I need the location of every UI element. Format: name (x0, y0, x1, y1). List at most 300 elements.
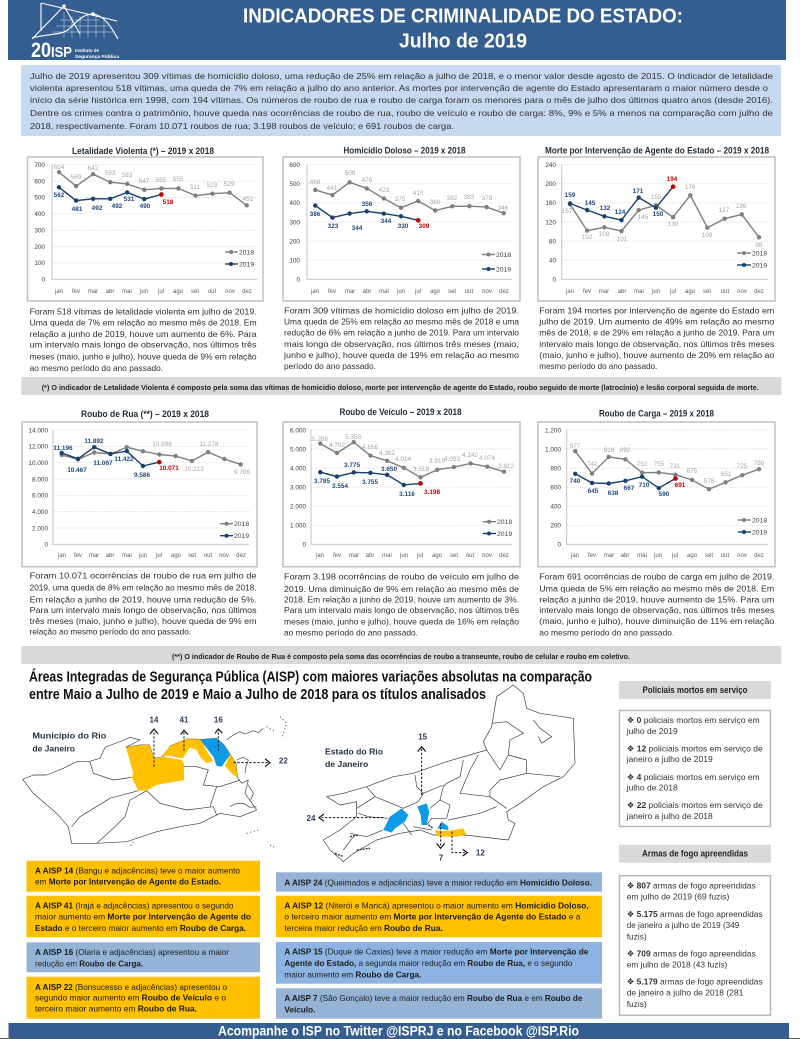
panel: Letalidade Violenta chart: abr (106, 289, 114, 295)
panel: Roubo de Carga chart: 731 (670, 463, 681, 470)
footer banner: Acompanhe o ISP no Twitter @ISPRJ e no Facebook @ISP.Rio (218, 1024, 579, 1038)
ISP logo: Instituto de (75, 48, 99, 53)
panel heading (619, 845, 771, 863)
panel: Letalidade Violenta chart: 490 (140, 203, 151, 210)
map labels: 16 (214, 716, 223, 725)
panel: Roubo de Veículo chart: set (450, 553, 458, 559)
panel: Roubo de Carga chart: set (705, 553, 713, 559)
callout: AISP 16: A AISP 16 (Olaria e adjacências) apresentou a maior (35, 947, 229, 957)
text: Letalidade Violenta description: relação a junho de 2019, houve um aumento de 6%. Para (30, 329, 257, 339)
panel: Roubo de Rua chart: 10.467 (67, 467, 87, 474)
panel: Roubo de Rua chart (22, 409, 257, 567)
panel: Homicídio Doloso chart: 200 (289, 238, 300, 245)
map title (32, 731, 106, 753)
panel: Homicídio Doloso chart: 344 (381, 218, 392, 225)
panel: Homicídio Doloso chart: 300 (289, 219, 300, 226)
callout: AISP 12 (276, 896, 602, 937)
list of police deaths: ❖ 4 policiais mortos em serviço em (627, 772, 760, 782)
panel: Homicídio Doloso chart: mar (345, 289, 355, 295)
ISP logo (31, 3, 119, 62)
panel: Roubo de Veículo chart: 3.198 (424, 489, 440, 496)
footnote: Letalidade Violenta: (*) O indicador de Letalidade Violenta é composto pela soma das vítimas de homicídio doloso, morte por intervenção de agente do Estado, roubo seguido de morte (latrocínio) e lesão corporal seguida de morte. (42, 383, 759, 392)
panel: Roubo de Carga chart: 1.000 (545, 446, 561, 453)
panel: Letalidade Violenta chart: set (191, 289, 199, 295)
map title: de Janeiro (32, 743, 75, 753)
panel: Roubo de Rua chart: 11.278 (199, 441, 219, 448)
panel: Roubo de Carga chart: abr (621, 553, 629, 559)
panel: Roubo de Veículo chart: jul (416, 553, 423, 559)
panel: Roubo de Carga chart: 590 (659, 491, 670, 498)
map title: de Janeiro (325, 759, 368, 769)
callout: AISP 15: maior aumento em Roubo de Carga. (284, 969, 421, 979)
panel: Roubo de Veículo chart: abr (366, 553, 374, 559)
panel: Letalidade Violenta chart: 562 (54, 192, 65, 199)
panel: Roubo de Veículo chart: jun (399, 553, 408, 559)
panel: Morte por Intervenção chart: 155 (651, 194, 662, 201)
list of seized firearms: ❖ 5.175 armas de fogo apreendidas (627, 909, 763, 919)
title (243, 6, 683, 52)
AISP 41 region (162, 739, 213, 763)
panel: Roubo de Rua chart: 10.213 (184, 466, 204, 473)
ISP logo: 20 (31, 39, 51, 62)
AISP section heading: entre Maio a Julho de 2019 e Maio a Julho de 2018 para os títulos analisados (29, 687, 486, 703)
panel: Homicídio Doloso chart: 0 (296, 277, 300, 284)
panel: Morte por Intervenção chart: 240 (545, 162, 556, 169)
panel: Morte por Intervenção chart: 171 (633, 188, 644, 195)
panel: Letalidade Violenta chart: 583 (122, 172, 133, 179)
text: Roubo de Carga description: ao mesmo período do ano passado. (539, 628, 674, 638)
panel: Roubo de Veículo chart: 5.286 (312, 436, 328, 443)
list of seized firearms: ❖ 807 armas de fogo apreendidas (627, 880, 756, 890)
panel: Morte por Intervenção chart: mai (634, 289, 644, 295)
panel: Letalidade Violenta chart: out (208, 289, 217, 295)
callout: AISP 15: Agente do Estado, a segunda maior redução em Roubo de Rua, e o segundo (284, 958, 573, 968)
panel: Letalidade Violenta chart: 593 (105, 170, 116, 177)
panel: Roubo de Carga chart: 200 (550, 523, 561, 530)
panel: Roubo de Veículo chart: 3.116 (399, 491, 415, 498)
panel: Roubo de Carga chart: 752 (637, 461, 648, 468)
panel: Homicídio Doloso chart: 323 (328, 223, 339, 230)
panel: Homicídio Doloso chart: 330 (398, 223, 409, 230)
text: Morte por Intervenção description: Foram 194 mortes por intervenção de agente do Estado em (539, 306, 774, 316)
callout: AISP 7: Veículo. (284, 1004, 315, 1014)
panel: Morte por Intervenção chart: 0 (552, 277, 556, 284)
panel: Roubo de Carga chart: 710 (639, 482, 650, 489)
panel: Roubo de Rua chart: 9.786 (234, 469, 250, 476)
map: Estado do Rio de Janeiro (307, 685, 575, 862)
panel: Roubo de Carga chart (538, 408, 775, 567)
panel: Homicídio Doloso chart: dez (499, 289, 509, 295)
title: Julho de 2019 (399, 30, 527, 52)
panel: Letalidade Violenta chart: 523 (207, 182, 218, 189)
text: Homicídio Doloso description: redução de 6% em relação a junho de 2019. Para um intervalo (284, 328, 519, 338)
text: Homicídio Doloso description: junho e julho), houve queda de 19% em relação ao mesmo (283, 350, 519, 360)
text: Roubo de Carga description: Foram 691 ocorrências de roubo de carga em julho de 2019. (539, 572, 774, 582)
legend: 2019 (239, 261, 254, 268)
panel: Morte por Intervenção chart: 157 (562, 208, 573, 215)
panel: Roubo de Veículo chart: mai (382, 553, 392, 559)
list of seized firearms: em julho de 2018 (43 fuzis) (627, 960, 727, 970)
panel: Homicídio Doloso chart: out (465, 289, 474, 295)
legend: 2018 (752, 250, 767, 257)
panel: Homicídio Doloso chart: 378 (482, 195, 493, 202)
ISP logo: Segurança Pública (75, 54, 119, 59)
panel: Roubo de Carga chart: 740 (570, 478, 581, 485)
panel: Letalidade Violenta chart: jan (54, 289, 63, 295)
map title: Estado do Rio (325, 747, 383, 757)
callout: AISP 14 (26, 861, 260, 892)
panel: Roubo de Veículo chart: 4.074 (479, 455, 495, 462)
text: Homicídio Doloso description: Uma queda de 25% em relação ao mesmo mês de 2018 e uma (284, 316, 519, 326)
panel: Roubo de Rua chart: 11.422 (114, 456, 134, 463)
panel: Letalidade Violenta chart: 531 (124, 196, 135, 203)
panel heading (619, 681, 771, 699)
callout: AISP 7: A AISP 7 (São Gonçalo) teve a maior redução em Roubo de Rua e em Roubo de (284, 993, 583, 1003)
text: Roubo de Rua description: Em relação a junho de 2019, houve uma redução de 5%. (30, 594, 257, 604)
callout: AISP 22: segundo maior aumento em Roubo de Veículo e o (35, 993, 226, 1003)
panel: Homicídio Doloso chart: 383 (464, 194, 475, 201)
text: Roubo de Rua description: Foram 10.071 ocorrências de roubo de rua em julho de (30, 571, 257, 581)
panel: Policiais mortos em serviço (619, 681, 771, 826)
panel: Morte por Intervenção chart: out (721, 289, 730, 295)
panel: Letalidade Violenta chart: 642 (88, 165, 99, 172)
panel: Homicídio Doloso chart: set (448, 289, 456, 295)
legend: 2018 (234, 521, 249, 528)
panel: Letalidade Violenta chart: 0 (41, 277, 45, 284)
panel: Letalidade Violenta chart: 700 (34, 162, 45, 169)
callout: AISP 16 (26, 942, 260, 972)
callout: AISP 22: terceiro maior aumento em Roubo de Rua. (35, 1003, 197, 1013)
panel: Morte por Intervenção chart: 40 (549, 258, 556, 264)
panel: Roubo de Rua chart: mai (122, 553, 132, 559)
list of police deaths: ❖ 12 policiais mortos em serviço de (627, 743, 763, 753)
panel: Roubo de Carga chart: 1.200 (545, 427, 561, 434)
panel: Roubo de Carga chart: 755 (654, 461, 665, 468)
list of police deaths: julho de 2019 (626, 726, 678, 736)
callout: AISP 14: A AISP 14 (Bangu e adjacências) teve o maior aumento (35, 865, 240, 875)
panel: Roubo de Veículo chart: ago (432, 553, 443, 559)
panel: Roubo de Rua chart: 0 (44, 542, 48, 549)
text: Morte por Intervenção description: julho de 2019. Um aumento de 49% em relação ao mesmo (538, 316, 775, 326)
panel: Roubo de Rua chart: set (188, 553, 196, 559)
map: Município do Rio de Janeiro (23, 716, 288, 848)
panel: Morte por Intervenção chart: 136 (736, 203, 747, 210)
panel heading: Policiais mortos em serviço (642, 685, 748, 695)
panel: Roubo de Veículo chart: fev (333, 553, 341, 559)
panel: Homicídio Doloso chart: 386 (310, 211, 321, 218)
callout: AISP 41: maior aumento em Morte por Intervenção de Agente do (35, 912, 251, 922)
panel: Roubo de Carga chart: dez (754, 553, 764, 559)
callout: AISP 22: A AISP 22 (Bonsucesso e adjacências) apresentou o (35, 982, 227, 992)
panel: Letalidade Violenta chart (28, 146, 263, 301)
panel: Morte por Intervenção chart: set (703, 289, 711, 295)
text: Letalidade Violenta description: Uma queda de 7% em relação ao mesmo mês de 2018. Em (30, 318, 257, 328)
panel: Morte por Intervenção chart (538, 146, 775, 301)
map title (325, 747, 383, 769)
panel: Letalidade Violenta chart: fev (72, 289, 80, 295)
panel: Roubo de Carga chart: 0 (557, 542, 561, 549)
arrows (319, 747, 467, 856)
AISP 7 region (437, 822, 448, 830)
panel: Roubo de Carga chart: jul (671, 553, 678, 559)
text: Letalidade Violenta description: um intervalo mais longo de observação, nos últimos três (30, 340, 257, 350)
chart title: Morte por Intervenção de Agente do Estado – 2019 x 2018 (545, 146, 769, 156)
panel: Letalidade Violenta chart: 452 (243, 196, 254, 203)
legend (483, 519, 512, 538)
list of police deaths: julho de 2018 (626, 782, 678, 792)
panel: Homicídio Doloso chart: 360 (430, 199, 441, 206)
panel: Morte por Intervenção chart: 88 (755, 242, 763, 249)
panel: Roubo de Veículo chart: 4.382 (379, 450, 395, 457)
list of seized firearms: fuzis) (627, 932, 647, 942)
AISP 16 region (200, 738, 230, 767)
text: Roubo de Veículo description: ao mesmo período do ano passado. (284, 628, 418, 638)
list of seized firearms: ❖ 5.179 armas de fogo apreendidas (627, 977, 763, 987)
panel: Roubo de Carga chart: 918 (604, 447, 615, 454)
legend (737, 250, 767, 269)
panel: Roubo de Carga chart: fev (588, 553, 596, 559)
panel: Morte por Intervenção chart: ago (685, 289, 696, 295)
panel: Roubo de Carga chart: jan (570, 553, 579, 559)
panel: Roubo de Carga chart: 400 (550, 504, 561, 510)
chart title: Roubo de Rua (**) – 2019 x 2018 (81, 409, 209, 420)
legend: 2018 (752, 517, 767, 524)
panel: Roubo de Veículo chart: 2.000 (290, 504, 306, 510)
panel: Morte por Intervenção chart: 176 (685, 184, 696, 191)
list of seized firearms: em julho de 2019 (69 fuzis) (627, 892, 729, 902)
map labels: 41 (180, 716, 189, 725)
panel: Morte por Intervenção chart: jun (651, 289, 660, 295)
panel: Letalidade Violenta chart: 529 (224, 181, 235, 188)
panel: Roubo de Rua chart: 11.196 (53, 445, 73, 452)
panel: Homicídio Doloso chart: abr (363, 289, 371, 295)
text: Letalidade Violenta description: Foram 518 vítimas de letalidade violenta em julho de 2019. (30, 307, 257, 317)
panel: Letalidade Violenta chart: 100 (34, 260, 45, 267)
panel: Roubo de Carga chart: 691 (675, 482, 686, 489)
panel: Roubo de Veículo chart: 4.656 (362, 444, 378, 451)
callout: AISP 41 (26, 896, 260, 937)
footnote: Roubo de Rua: (**) O indicador de Roubo de Rua é composto pela soma das ocorrências de roubo a transeunte, roubo de celular e roubo em coletivo. (172, 652, 630, 661)
footnote: Roubo de Rua (21, 646, 781, 664)
summary text block: Julho de 2019 apresentou 309 vítimas de homicídio doloso, uma redução de 25% em relação a julho de 2018, e o menor valor desde agosto de 2015. O indicador de letalidade (30, 71, 773, 81)
panel: Morte por Intervenção chart: 194 (667, 176, 678, 183)
panel: Homicídio Doloso chart: 600 (289, 162, 300, 169)
panel: Roubo de Carga chart: 638 (608, 490, 619, 497)
panel: Morte por Intervenção chart: fev (583, 289, 591, 295)
text: Roubo de Carga description: intervalo mais longo de observação, nos últimos três meses (539, 605, 774, 615)
panel: Roubo de Veículo chart: 3.812 (498, 463, 514, 470)
panel: Roubo de Carga chart: 788 (754, 460, 765, 467)
callout: AISP 41: A AISP 41 (Irajá e adjacências) apresentou o segundo (35, 900, 234, 910)
legend: 2019 (234, 533, 249, 540)
panel: Homicídio Doloso chart: 346 (498, 205, 509, 212)
text: Roubo de Veículo description: Para um intervalo mais longo de observação, nos últimos três (284, 605, 519, 615)
panel: Morte por Intervenção chart: dez (754, 289, 764, 295)
panel: Homicídio Doloso chart: 441 (327, 185, 338, 192)
panel: Homicídio Doloso chart: mai (379, 289, 389, 295)
panel: Roubo de Rua chart: jun (138, 553, 147, 559)
panel heading: Armas de fogo apreendidas (642, 848, 748, 858)
summary text block: início da série histórica em 1998, com 194 vítimas. Os números de roubo de rua e roubo de carga foram os menores para o mês de julho dos últimos quatro anos (desde 2016). (30, 95, 773, 105)
footer banner (0, 1023, 800, 1039)
panel: Roubo de Veículo chart: 3.518 (413, 466, 429, 473)
panel: Roubo de Veículo chart: out (466, 553, 475, 559)
list of police deaths: janeiro a julho de 2019 (626, 754, 713, 764)
title: INDICADORES DE CRIMINALIDADE DO ESTADO: (243, 6, 683, 28)
text: Morte por Intervenção description (538, 306, 775, 371)
legend (225, 249, 254, 268)
panel: Roubo de Veículo chart: nov (482, 553, 492, 559)
panel: Homicídio Doloso chart: 423 (379, 187, 390, 194)
panel: Letalidade Violenta chart: mar (88, 289, 98, 295)
text: Morte por Intervenção description: (maio, junho e julho), houve aumento de 20% em relação ao (539, 350, 775, 360)
panel: Roubo de Rua chart: abr (106, 553, 114, 559)
panel: Homicídio Doloso chart: 344 (352, 225, 363, 232)
text: Morte por Intervenção description: intervalo mais longo de observação, nos últimos três meses (539, 339, 774, 349)
panel: Roubo de Veículo chart: 3.554 (332, 483, 348, 490)
map labels: 12 (476, 849, 485, 858)
panel: Roubo de Carga chart: 578 (704, 478, 715, 485)
list of seized firearms: fuzis) (627, 999, 647, 1009)
panel: Roubo de Carga chart: mai (637, 553, 647, 559)
panel: Roubo de Rua chart: 14.000 (28, 427, 48, 434)
panel: Morte por Intervenção chart: jul (669, 289, 676, 295)
callout: AISP 15 (276, 942, 602, 984)
chart title: Roubo de Carga – 2019 x 2018 (599, 408, 714, 419)
panel: Roubo de Veículo chart: 4.000 (290, 465, 306, 472)
callout: AISP 12: o terceiro maior aumento em Morte por Intervenção de Agente do Estado e a (284, 912, 581, 922)
panel: Roubo de Carga chart: ago (687, 553, 698, 559)
text: Roubo de Rua description: três meses (maio, junho e julho), houve queda de 9% em (30, 616, 257, 626)
text: Roubo de Carga description: (maio, junho e julho), houve diminuição de 11% em relação (539, 616, 775, 626)
panel: Morte por Intervenção chart: 101 (617, 236, 628, 243)
panel: Letalidade Violenta chart: mai (122, 289, 132, 295)
AISP 24 region (383, 808, 408, 833)
panel: Homicídio Doloso chart: 356 (362, 201, 373, 208)
panel: Morte por Intervenção chart: 102 (582, 234, 593, 241)
panel: Morte por Intervenção chart: 145 (585, 200, 596, 207)
legend: 2019 (752, 529, 767, 536)
panel: Letalidade Violenta chart: 481 (72, 206, 83, 213)
panel: Homicídio Doloso chart: jun (396, 289, 405, 295)
panel: Homicídio Doloso chart: 375 (395, 196, 406, 203)
arrows (150, 729, 270, 767)
panel: Roubo de Carga chart: 675 (687, 468, 698, 475)
panel: Homicídio Doloso chart: 468 (310, 179, 321, 186)
panel: Morte por Intervenção chart: 150 (653, 211, 664, 218)
panel: Letalidade Violenta chart: dez (242, 289, 252, 295)
panel: Roubo de Rua chart: dez (236, 553, 246, 559)
panel: Roubo de Carga chart: 742 (587, 461, 598, 468)
panel: Roubo de Rua chart: 2.000 (32, 525, 48, 532)
list of seized firearms: de janeiro a julho de 2019 (349 (627, 920, 740, 930)
panel: Roubo de Veículo chart: jan (315, 553, 324, 559)
text: Roubo de Veículo description: meses (maio, junho e julho), houve queda de 16% em relação (284, 616, 519, 626)
text: Roubo de Carga description (539, 572, 775, 638)
chart title: Homicídio Doloso – 2019 x 2018 (344, 146, 466, 156)
panel: Roubo de Rua chart: 10.071 (159, 465, 179, 472)
panel: Roubo de Carga chart: 725 (737, 463, 748, 470)
panel: Roubo de Veículo chart: 4.053 (444, 456, 460, 463)
text: Morte por Intervenção description: mês de 2018, e de 29% em relação a junho de 2019. Para um (539, 328, 774, 338)
panel: Homicídio Doloso chart: 500 (289, 181, 300, 188)
list of police deaths: ❖ 22 policiais mortos em serviço de (627, 800, 763, 810)
header banner (8, 0, 786, 62)
text: Roubo de Rua description: relação ao mesmo período do ano passado. (30, 627, 191, 637)
AISP 15 region (417, 803, 429, 825)
list of seized firearms: ❖ 709 armas de fogo apreendidas (627, 948, 756, 958)
panel: Letalidade Violenta chart: 518 (163, 199, 174, 206)
map labels: 7 (439, 853, 444, 862)
legend: 2018 (239, 249, 254, 256)
panel: Morte por Intervenção chart: 109 (599, 231, 610, 238)
callout: AISP 12: terceira maior redução em Roubo de Rua. (284, 923, 443, 933)
map labels (150, 716, 288, 765)
panel: Letalidade Violenta chart: 492 (92, 205, 103, 212)
panel: Roubo de Veículo chart: mar (349, 553, 359, 559)
panel: Morte por Intervenção chart: 108 (702, 232, 713, 239)
panel: Roubo de Veículo chart: 4.014 (395, 456, 411, 463)
panel: Letalidade Violenta chart: nov (225, 289, 235, 295)
text: Roubo de Carga description: Uma queda de 5% em relação ao mesmo mês de 2018. Em (539, 584, 774, 594)
callout: AISP 14: em Morte por Intervenção de Agente do Estado. (35, 877, 221, 887)
text: Roubo de Rua description: Para um intervalo mais longo de observação, nos últimos (30, 605, 257, 615)
panel: Roubo de Veículo chart (283, 407, 520, 567)
panel: Roubo de Veículo chart: 5.358 (345, 434, 361, 441)
panel: Roubo de Rua chart: 4.000 (32, 509, 48, 516)
panel: Morte por Intervenção chart: mar (599, 289, 609, 295)
panel: Roubo de Rua chart: jul (155, 553, 162, 559)
panel: Roubo de Veículo chart: 5.000 (290, 446, 306, 453)
panel: Roubo de Carga chart: out (721, 553, 730, 559)
panel: Morte por Intervenção chart: 80 (549, 238, 556, 245)
legend: 2019 (496, 266, 511, 273)
summary text block: 2018, respectivamente. Foram 10.071 roubos de rua; 3.198 roubos de veículo; e 691 roubos de carga. (30, 121, 454, 131)
panel: Roubo de Carga chart: 600 (550, 484, 561, 492)
text: Homicídio Doloso description: mais longo de observação, nos últimos três meses (maio, (284, 339, 519, 349)
panel: Letalidade Violenta chart: jul (157, 289, 164, 295)
panel: Letalidade Violenta chart: 569 (71, 174, 82, 181)
panel: Roubo de Rua chart: 12.000 (28, 444, 48, 451)
panel: Homicídio Doloso chart: 382 (447, 195, 458, 202)
panel: Morte por Intervenção chart: 132 (600, 205, 611, 212)
panel: Letalidade Violenta chart: 547 (139, 178, 150, 185)
panel: Homicídio Doloso chart: fev (328, 289, 336, 295)
text: Roubo de Veículo description: 2018. Em relação a junho de 2019, houve um aumento de 3%. (284, 594, 519, 604)
legend (738, 517, 767, 536)
chart title: Letalidade Violenta (*) – 2019 x 2018 (72, 146, 214, 157)
map title: Município do Rio (32, 731, 106, 741)
panel: Morte por Intervenção chart: 160 (545, 200, 556, 207)
panel: Roubo de Rua chart: nov (219, 553, 229, 559)
summary text block: Dentre os crimes contra o patrimônio, houve queda nas ocorrências de roubo de rua, roubo de veículo e roubo de carga: 8%, 9% e 5% a menos na comparação com julho de (30, 108, 773, 118)
panel: Roubo de Veículo chart: 3.755 (362, 479, 378, 486)
text: Roubo de Carga description: relação a junho de 2019, houve aumento de 15%. Para um (539, 594, 774, 604)
panel: Morte por Intervenção chart: 159 (565, 192, 576, 199)
panel: Roubo de Carga chart: 651 (721, 471, 732, 478)
legend: 2018 (497, 519, 512, 526)
panel: Roubo de Veículo chart: 4.242 (462, 452, 478, 459)
text: Letalidade Violenta description: ao mesmo período do ano passado. (30, 363, 163, 373)
panel: Morte por Intervenção chart: 120 (545, 219, 556, 226)
panel: Roubo de Carga chart: 977 (570, 443, 581, 450)
panel: Roubo de Carga chart: mar (604, 553, 614, 559)
text: Roubo de Rua description (30, 571, 257, 637)
text: Roubo de Veículo description (284, 572, 519, 638)
panel: Roubo de Carga chart: 667 (624, 485, 635, 492)
panel: Roubo de Veículo chart: 0 (302, 542, 306, 549)
panel: Letalidade Violenta chart: 600 (34, 178, 45, 185)
